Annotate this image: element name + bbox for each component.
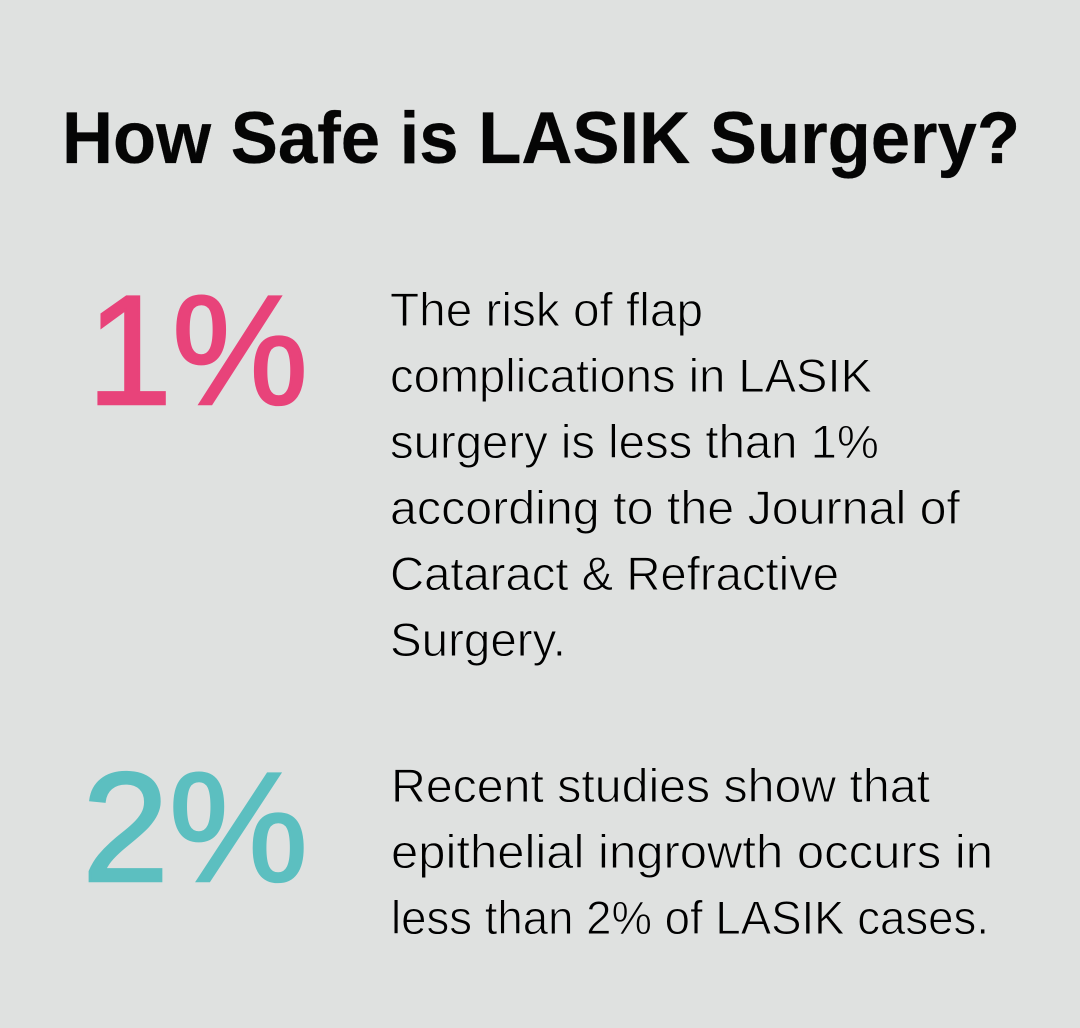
stat: 2%: 2% bbox=[82, 741, 308, 915]
text block: flap complications description: The risk of flap bbox=[390, 283, 703, 336]
text block: epithelial ingrowth description: epithelial ingrowth occurs in bbox=[391, 825, 993, 878]
text block: flap complications description: complications in LASIK bbox=[390, 349, 872, 402]
text block: flap complications description: Surgery. bbox=[390, 613, 566, 666]
title: How Safe is LASIK Surgery? bbox=[62, 98, 1020, 179]
text block: flap complications description bbox=[390, 283, 961, 666]
text block: flap complications description: surgery is less than 1% bbox=[390, 415, 879, 468]
panel: flap complications statistic bbox=[87, 264, 961, 666]
text block: epithelial ingrowth description: Recent studies show that bbox=[391, 759, 930, 812]
panel: epithelial ingrowth statistic bbox=[82, 741, 993, 944]
text block: epithelial ingrowth description: less than 2% of LASIK cases. bbox=[391, 891, 989, 944]
text block: flap complications description: according to the Journal of bbox=[390, 481, 961, 534]
stat: 1%: 1% bbox=[87, 264, 308, 438]
text block: flap complications description: Cataract & Refractive bbox=[390, 547, 839, 600]
text block: epithelial ingrowth description bbox=[391, 759, 993, 944]
